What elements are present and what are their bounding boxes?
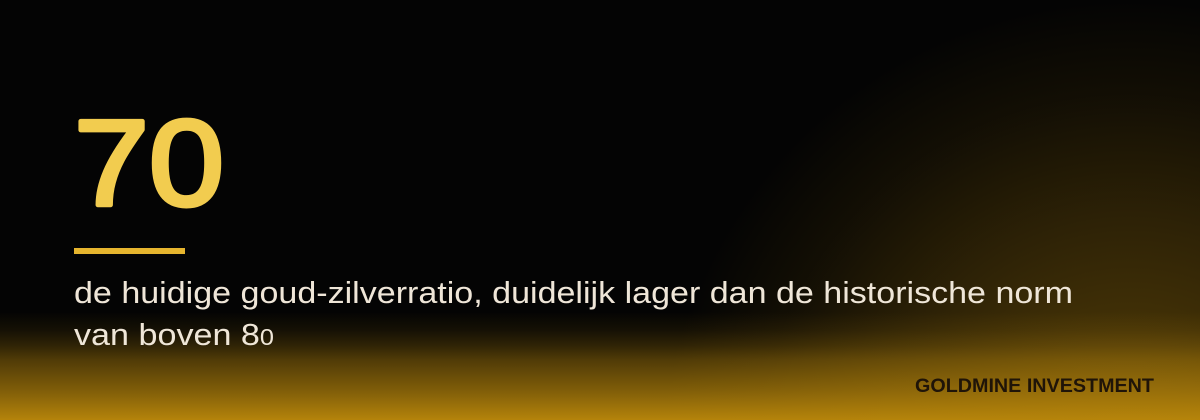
big number: 70 (74, 95, 224, 231)
brand name: GOLDMINE INVESTMENT (915, 376, 1154, 397)
description text: van boven 8 0 (74, 317, 274, 352)
accent bar (74, 248, 185, 254)
description text: de huidige goud-zilverratio, duidelijk lager dan de historische norm (74, 275, 1073, 310)
description text (74, 275, 1073, 352)
